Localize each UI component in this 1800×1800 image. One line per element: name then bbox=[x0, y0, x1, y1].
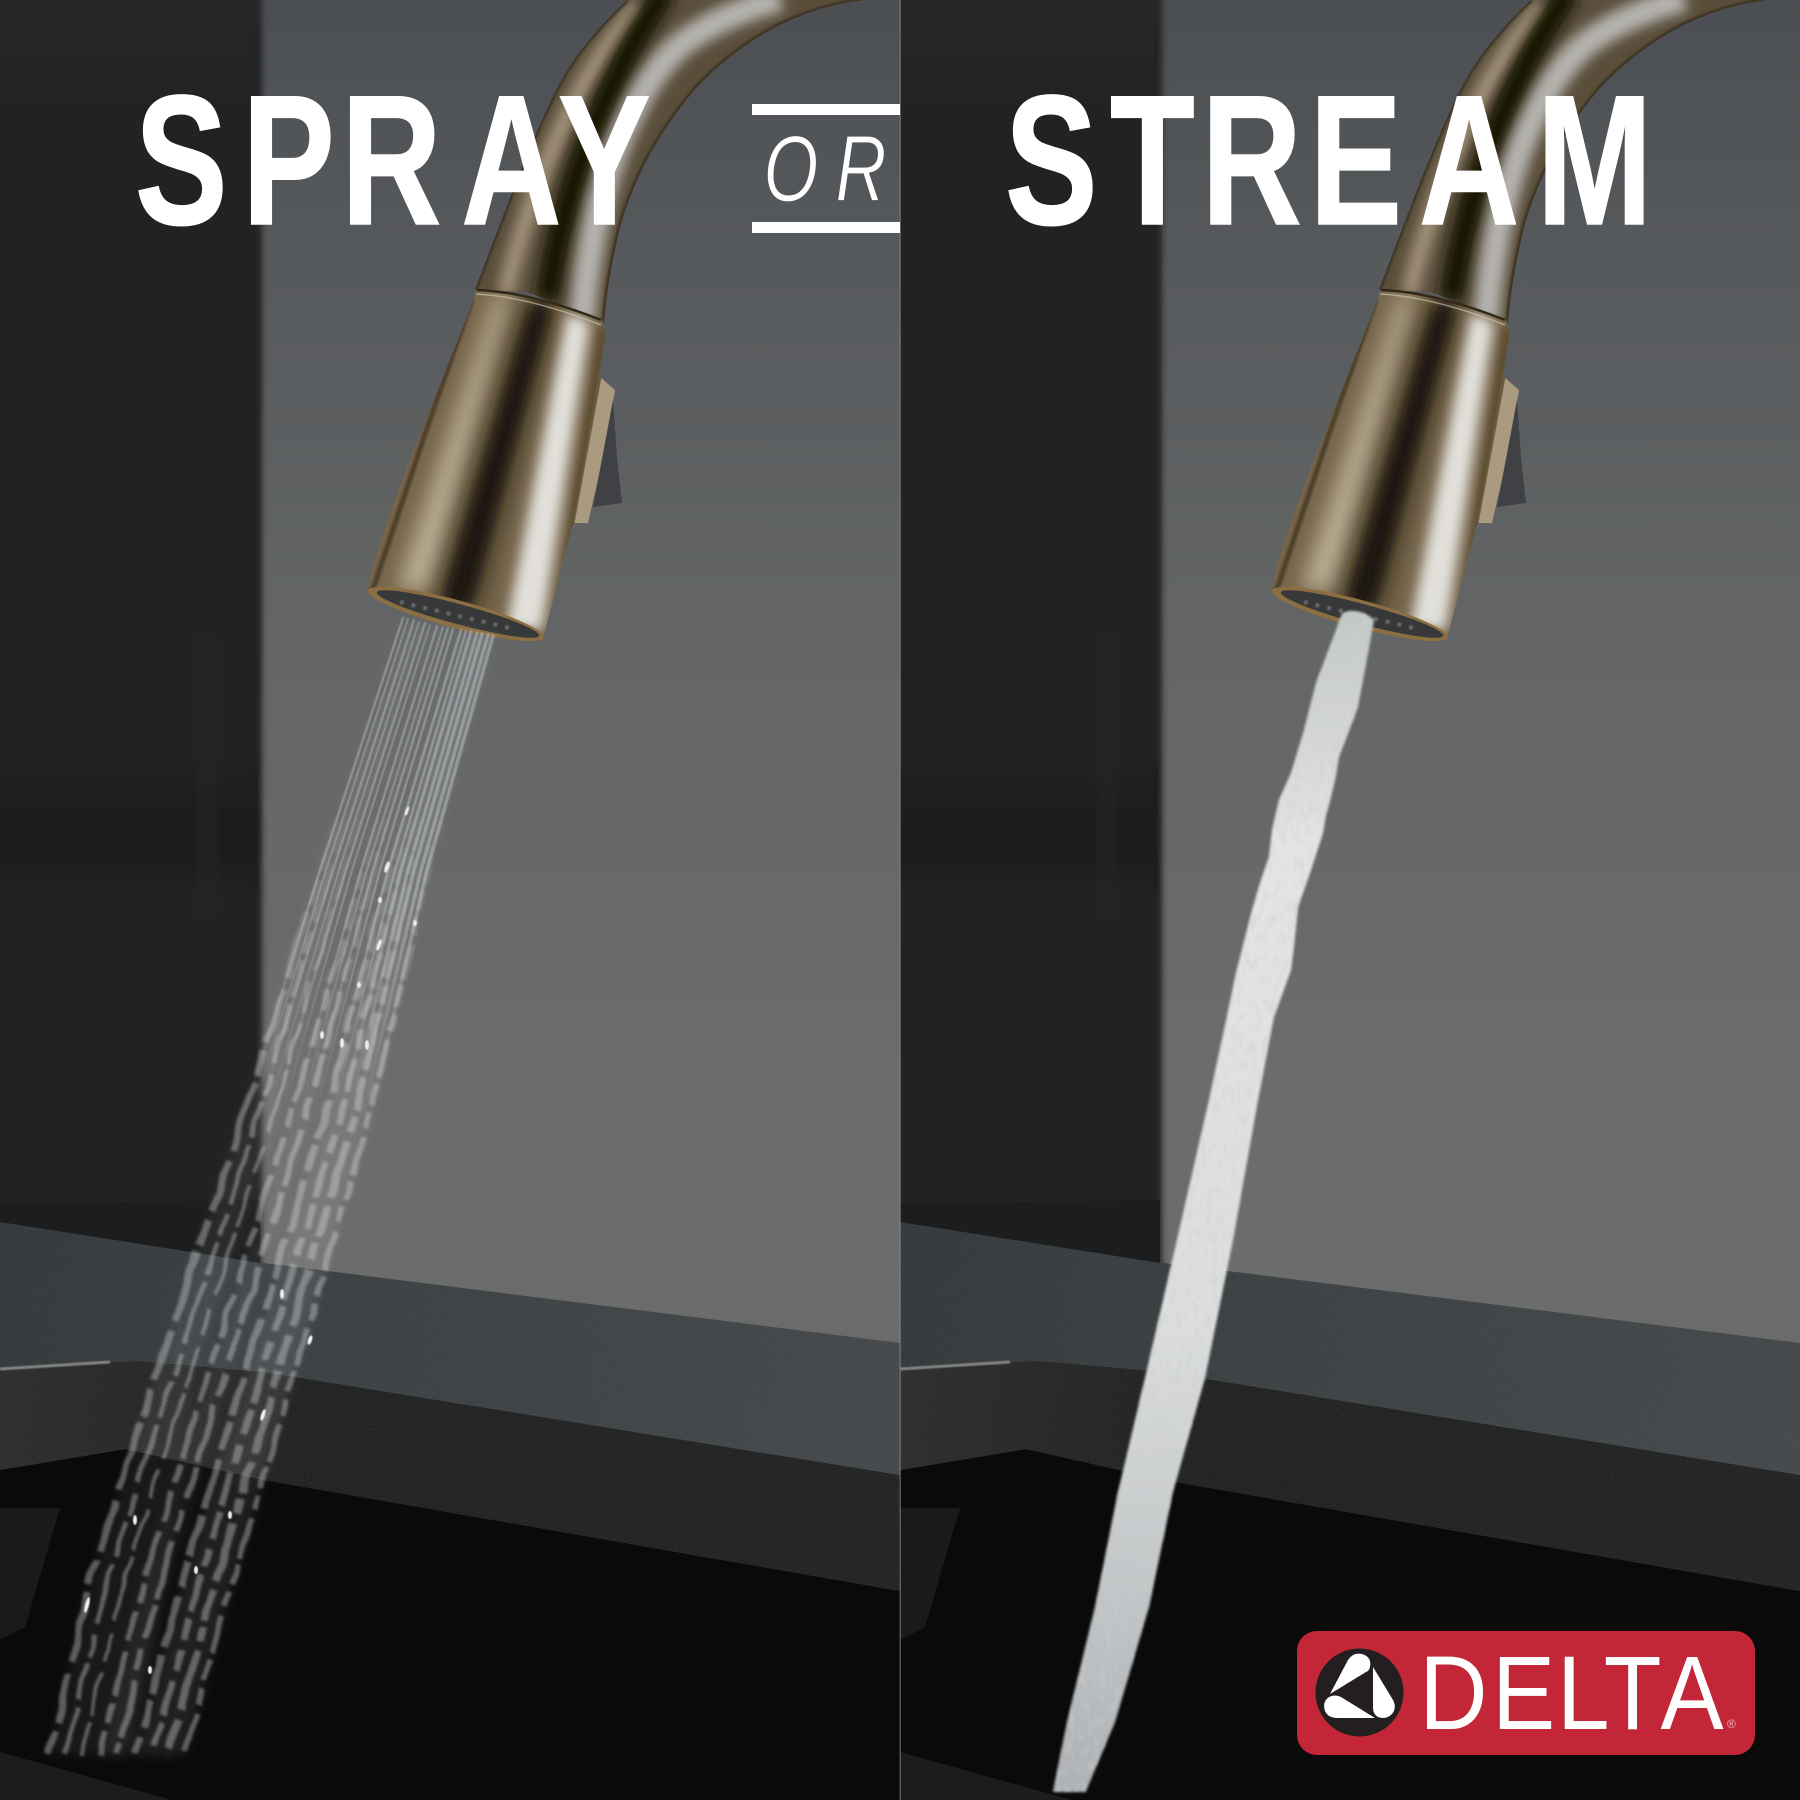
illustration: stream of water bbox=[1054, 612, 1373, 1791]
illustration: faucet, spray panel bbox=[355, 0, 880, 651]
divider between panels bbox=[900, 0, 901, 1800]
illustration: spray water bbox=[49, 618, 493, 1755]
logo: Delta badge: DELTA bbox=[1419, 1635, 1724, 1752]
illustration: faucet, stream panel bbox=[1259, 0, 1784, 651]
callout: OR between rules bbox=[752, 104, 900, 233]
panel: spray background scene bbox=[0, 0, 900, 1800]
heading: SPRAY: SPRAY bbox=[135, 57, 651, 264]
water sparkles bbox=[83, 806, 417, 1674]
icon: Delta triangle mark bbox=[1316, 1648, 1404, 1736]
logo: Delta badge bbox=[1297, 1631, 1755, 1755]
callout: OR between rules: OR bbox=[764, 116, 886, 221]
panel: stream background scene bbox=[880, 0, 1800, 1800]
heading: STREAM: STREAM bbox=[1005, 57, 1652, 264]
logo: Delta badge: ® bbox=[1727, 1717, 1736, 1731]
